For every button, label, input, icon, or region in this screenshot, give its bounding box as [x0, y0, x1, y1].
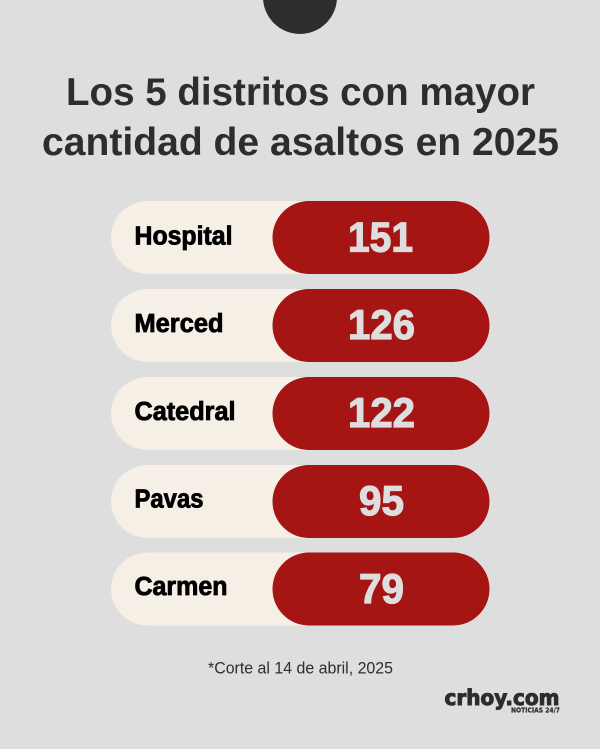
row: Pavas: [111, 465, 490, 538]
title: Los 5 distritos con mayor: [66, 71, 535, 114]
row: Merced: 126: [348, 301, 415, 348]
ranking list: [111, 201, 490, 626]
row: Merced: Merced: [134, 310, 224, 338]
row: Pavas: Pavas: [134, 486, 204, 514]
row: Hospital: [111, 201, 490, 274]
row: Catedral: [111, 377, 490, 450]
row: Catedral: 122: [348, 389, 415, 436]
row: Carmen: 79: [359, 565, 404, 612]
row: Merced: [111, 289, 490, 362]
title: [42, 71, 559, 164]
title: cantidad de asaltos en 2025: [42, 121, 559, 164]
footnote: *Corte al 14 de abril, 2025: [208, 658, 393, 678]
row: Catedral: Catedral: [134, 398, 236, 426]
logo: crhoy.com: NOTICIAS 24/7: [511, 706, 560, 714]
row: Carmen: Carmen: [134, 573, 228, 601]
row: Hospital: 151: [348, 214, 413, 260]
row: Pavas: 95: [359, 477, 404, 524]
top semicircle: [263, 0, 337, 34]
row: Carmen: [111, 552, 490, 626]
logo: crhoy.com: crhoy.com: [444, 686, 560, 710]
row: Hospital: Hospital: [134, 222, 232, 250]
